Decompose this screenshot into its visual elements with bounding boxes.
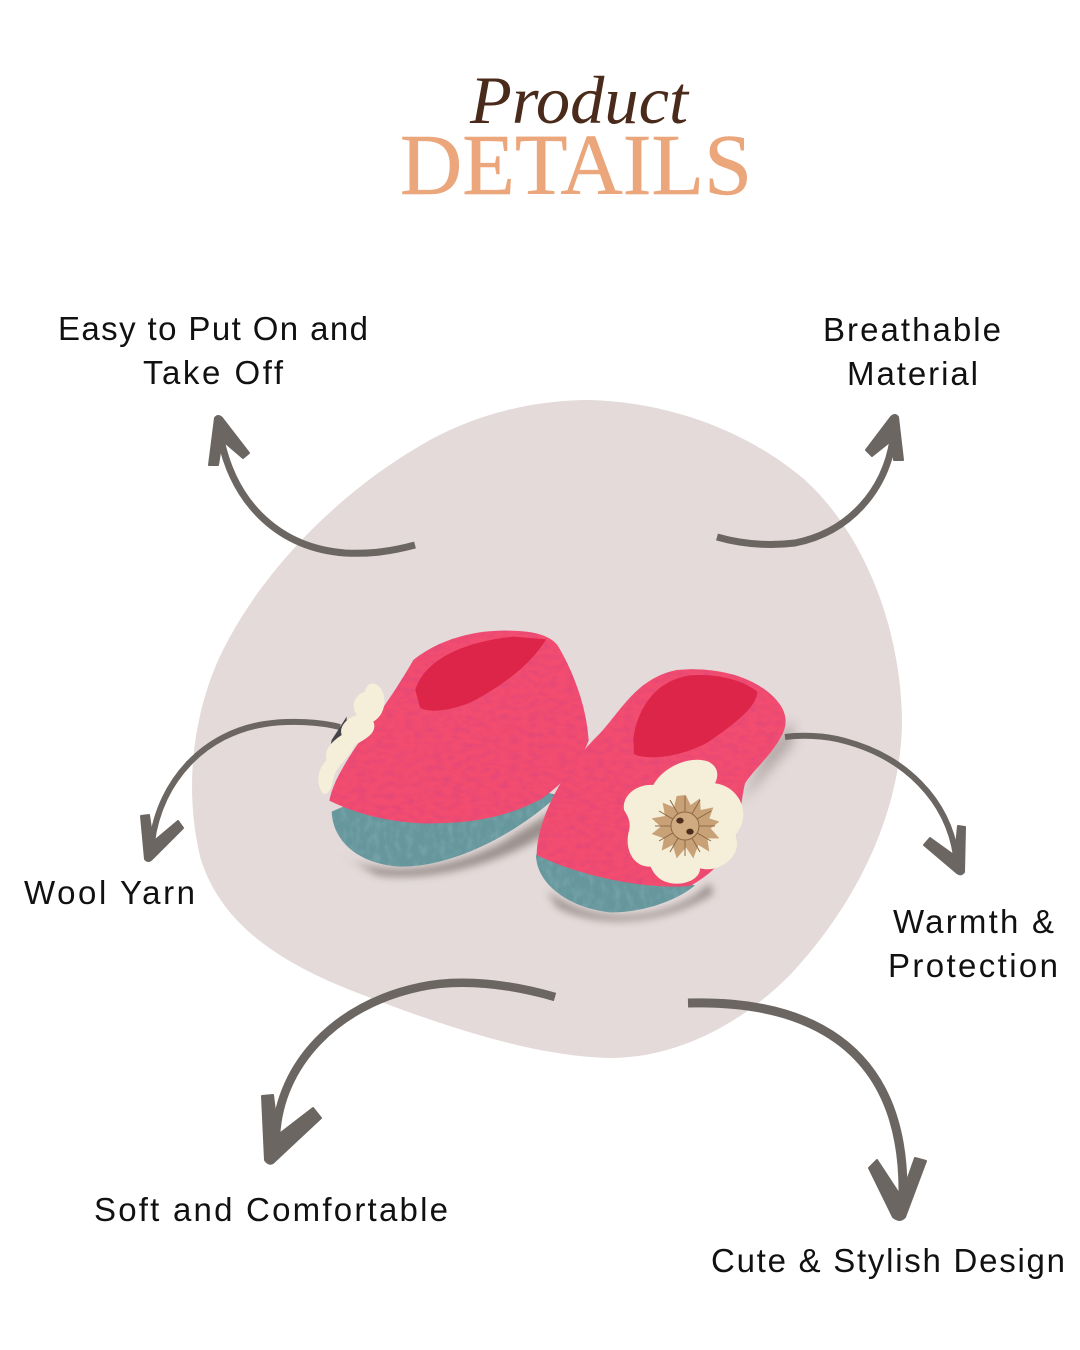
title line: Product: Product	[469, 62, 690, 138]
left bootie opening	[415, 637, 546, 711]
button	[652, 795, 719, 858]
label: Breathable Material: Breathable	[823, 311, 1001, 348]
label: Breathable Material	[823, 311, 1001, 392]
right bootie opening	[633, 675, 757, 757]
background blob	[192, 400, 902, 1058]
left bootie body	[329, 631, 589, 823]
arrow: to Cute and Stylish Design	[688, 1003, 926, 1220]
label: Easy to Put On and Take Off	[58, 310, 368, 391]
left bootie	[318, 631, 589, 867]
label: Breathable Material: Material	[847, 355, 978, 392]
product photo: crochet baby booties	[318, 631, 793, 921]
arrow: to Breathable Material	[717, 415, 903, 545]
label: Warmth and Protection: Warmth &	[893, 903, 1054, 940]
arrow: to Warmth and Protection	[785, 736, 965, 874]
right bootie	[536, 669, 786, 912]
label: Cute and Stylish Design: Cute & Stylish Design	[711, 1242, 1065, 1279]
label: Easy to Put On and Take Off: Take Off	[143, 354, 284, 391]
title	[400, 62, 752, 213]
right bootie sole	[536, 843, 695, 912]
right bootie flower	[624, 760, 743, 884]
label: Wool Yarn: Wool Yarn	[24, 874, 195, 911]
left bootie sole	[332, 790, 558, 867]
right bootie body	[537, 669, 786, 887]
label: Easy to Put On and Take Off: Easy to Put On and	[58, 310, 368, 347]
arrow: to Easy to Put On and Take Off	[209, 416, 415, 553]
arrow: to Wool Yarn	[141, 722, 340, 861]
shadows	[340, 720, 793, 921]
label: Soft and Comfortable: Soft and Comfortable	[94, 1191, 448, 1228]
left bootie flower	[318, 683, 384, 794]
label: Warmth and Protection	[888, 903, 1058, 984]
label: Warmth and Protection: Protection	[888, 947, 1058, 984]
left bootie flower backing	[328, 717, 347, 757]
arrow: to Soft and Comfortable	[262, 983, 555, 1164]
title line: DETAILS: DETAILS	[400, 116, 752, 213]
